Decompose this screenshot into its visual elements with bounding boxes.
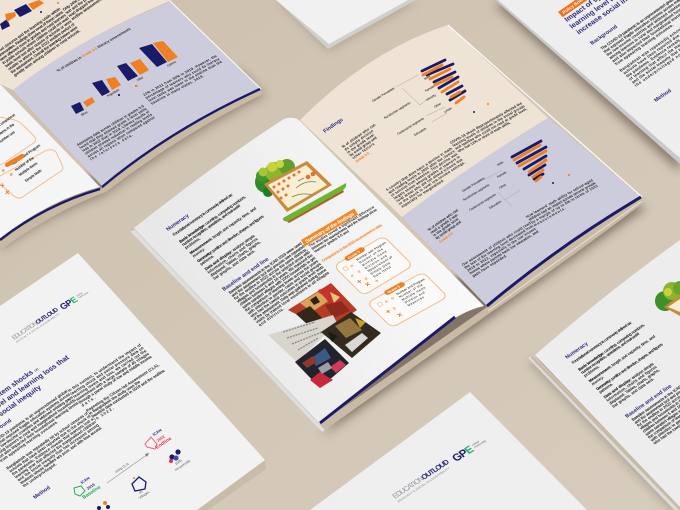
text block: left page grade items: Multiple Items: [18, 161, 39, 177]
callout: grade 5 competency box: Division and: [404, 291, 426, 304]
icon: villages: [132, 477, 151, 500]
callout: grade 3 competency box: Number and Program: [355, 241, 387, 261]
text block: lavender paragraph one: Assessing data across children in grades 3-5: [76, 104, 145, 147]
chart labels: beige chart categories: Education: [413, 127, 428, 137]
text block: numeracy right booklet: problems.: [582, 364, 601, 378]
label: comparison subheading: Comparison in the 2019 assessment in data: [320, 222, 384, 263]
text block: numeracy right booklet: number recognition, operations, and real-world: [580, 331, 640, 375]
binding: navy band on right page: [487, 197, 641, 306]
text block: beige paragraph one: A country that does have a decline in math: [385, 147, 453, 192]
chart labels: lavender chart categories: Gender Perception: [461, 176, 486, 193]
panel: white cover: [0, 253, 265, 510]
text block: background paragraphs: from appearing learning outcomes.: [614, 23, 674, 66]
text block: beige paragraph two: learning levels of children in the social groups: [452, 104, 526, 148]
text block: beige paragraph one: especially for marginalised.: [400, 179, 445, 208]
callout: grade 3 competency box: Measurement of: [367, 255, 393, 273]
callout: grade 3 competency box: Data Items: [372, 265, 392, 278]
text block: baseline paragraph: visits by trained local volunteers in all villages: [254, 270, 330, 324]
text block: beige paragraph one: to the shock in rural low-income settings,: [398, 161, 466, 206]
text block: lavender paragraph two: 21% in 2022 from 36% in 2019. However, the: [142, 54, 218, 97]
icon: villages: 45: [138, 490, 144, 495]
label: grade pill left: [4, 153, 25, 168]
text block: lavender intro: read a grade 2 text: [430, 213, 459, 235]
chart labels: beige chart categories: Rural/urban segments: [383, 101, 412, 120]
logo: GPE: [58, 287, 92, 311]
text block: beige paragraph one: rural areas who did not attend schools due: [395, 158, 464, 203]
callout: grade 3 competency box: ÷: [374, 278, 382, 284]
binding: navy band on left page: [320, 317, 455, 423]
icon: math symbols left page: [0, 168, 13, 197]
text block: findings intro: do simple division: [344, 129, 374, 152]
text block: baseline paragraph: for the endline in 2022 across the same districts,: [233, 247, 308, 301]
text block: numeracy definitions: Geometry: position and direction, shapes, and figures: [196, 214, 265, 263]
heading: baseline and end line: Baseline and end line: [221, 257, 270, 292]
booklet: main open spread: [130, 25, 646, 436]
bar chart: literacy assessment results: Uttar: [136, 75, 144, 82]
callout: grade 5 competency box: Number of the: [398, 283, 424, 299]
bar chart: literacy assessment results: Odisha: [166, 60, 177, 68]
diagram: method endline: ICAN: [151, 428, 163, 437]
text block: baseline paragraph: Baseline assessments in the ICAN 2019 were used: [227, 241, 303, 295]
text block: cover second column: Repeating the Citizen-led Assessment (CLA),: [85, 362, 160, 413]
text block: left page grade items: Number and Program: [11, 144, 41, 166]
text block: numeracy definitions: displayed. Tables, charts, graphs,: [209, 240, 262, 277]
text block: lavender intro: Grade 3-5: [438, 232, 454, 244]
callout: grade 3 competency box: Number of the: [358, 247, 384, 264]
callout: grade box on left page: [0, 117, 63, 198]
text block: beige paragraphs: greatly seen among children in rural schools.: [12, 28, 81, 77]
callout: grade 5 competency box: [366, 271, 448, 328]
callout: grade 3 competency box: Division and: [364, 254, 388, 270]
text block: beige paragraph two: COVID-19 shock disproportionately affected the: [449, 102, 523, 145]
text block: cover first column: the pandemic. Evidence reveals that learners lost a: [11, 416, 95, 476]
text block: lavender paragraph one: Our assessment of children who could read: [461, 221, 532, 267]
text block: cover first column: students whose families are poor, and with less access: [19, 425, 102, 485]
text block: baseline paragraph: who had the lowest outcomes in grade level tests: [249, 264, 325, 318]
diagram: method endline: Endline: [154, 436, 173, 450]
text block: cover second column: In this context, to understand the impact of: [66, 342, 143, 393]
logo: GPE: Global: [471, 440, 480, 447]
panel: beige page section: [0, 0, 172, 90]
text block: cover second column: baseline data conducted in 2019 and the endline: [90, 368, 166, 418]
binding: page block of the booklet: [130, 197, 643, 432]
text block: beige paragraphs: the assessment. Overall the learning losses were: [9, 25, 78, 74]
booklet: bottom centre cover: [310, 392, 587, 510]
text block: baseline paragraph: of the assessment. Data was gathered during home: [252, 267, 327, 321]
heading: method cover: Method: [32, 485, 52, 500]
text block: numeracy right booklet: Data and display: analyse simple: [602, 361, 655, 399]
text block: findings intro: in the grade level: [346, 133, 375, 154]
text block: summary paragraph: The studies reveal a significant difference: [308, 205, 375, 248]
bar chart: literacy assessment results: [71, 41, 178, 117]
diagram: method baseline: ICAN: [79, 476, 91, 485]
text block: beige paragraph one: of schools from baseline. This decline was: [390, 152, 459, 197]
text block: numeracy definitions: patterns.: [199, 253, 215, 266]
text block: lavender paragraph one: homes where parents have low education, and: [469, 230, 539, 275]
callout: grade 5 competency box: e: [383, 299, 390, 305]
text block: lavender intro: % of children who can: [427, 208, 459, 232]
logo: education out loud: EDUCATIONOUTLOUD: [390, 457, 452, 500]
text block: beige paragraph two: who lost 12% or more of math skills.: [457, 121, 512, 153]
text block: lavender intro: by social group and: [435, 220, 462, 240]
text block: cover first column: schools that have been reported due to the shock of: [8, 413, 92, 473]
callout: grade 3 competency box: [332, 234, 413, 296]
callout: grade 5 competency box: ×: [395, 311, 405, 319]
text block: numeracy right booklet: information, charts and figures: [605, 364, 658, 402]
chart labels: lavender chart categories: Education: [488, 200, 503, 210]
booklet: right open page: [528, 240, 680, 510]
text block: lavender paragraph two: baseline in many states, 2019.: [150, 74, 205, 105]
illustration: tree with number board: [255, 159, 346, 223]
text block: baseline right booklet: [630, 367, 680, 445]
logo: GPE: Partnership: [78, 291, 90, 299]
text block: numeracy right booklet: [570, 315, 680, 409]
logo: education out loud: EDUCATIONOUTLOUD: [11, 306, 61, 341]
callout: grade 5 competency box: Multiple Items: [401, 286, 427, 301]
text block: numeracy right booklet: patterns.: [598, 381, 614, 394]
callout: grade 5 competency box: ☐: [376, 301, 385, 309]
chart labels: beige chart categories: Male: [423, 74, 432, 81]
text block: numeracy definitions: Foundational numeracy is commonly defined as:: [171, 192, 234, 237]
text block: numeracy right booklet: Basic knowledge: counting, comparing numbers,: [577, 322, 646, 372]
text block: lavender paragraph one: 2019 to 2022, especially in the low income: [466, 227, 537, 272]
tag: orange article label: [558, 0, 591, 17]
text block: beige paragraphs: [0, 6, 82, 77]
shadow: main booklet: [322, 190, 646, 436]
bar chart: lavender horizontal funnel bars: [512, 141, 546, 181]
chart labels: beige chart categories: Minority: [425, 93, 437, 102]
text block: baseline paragraph: with attention to gender, caste and social groups: [246, 261, 322, 315]
text block: findings intro: [341, 123, 390, 163]
icon: people: [97, 501, 110, 510]
text block: numeracy definitions: money.: [191, 247, 206, 258]
chart labels: beige chart categories: [371, 74, 489, 137]
text block: numeracy right booklet: Geometry: position and direction, shapes, and figures: [595, 342, 664, 391]
booklet: top centre closed: [276, 0, 418, 50]
text block: second beige paragraph: [61, 0, 136, 21]
cover content: title, background text and method, on a single left margin: [0, 347, 137, 500]
text block: lavender paragraph one: [461, 221, 542, 278]
text block: findings intro: % of children who can: [341, 123, 377, 149]
text block: beige paragraph two: and families who could not read at grade level,: [454, 107, 528, 150]
text block: numeracy right booklet: money.: [590, 375, 605, 386]
text block: numeracy definitions: bar graphs, and data sets.: [212, 248, 256, 281]
logo: GPE: GPE: [58, 295, 80, 311]
callout: grade 5 competency box: Grade 5: [387, 285, 401, 294]
binding: navy band left: [0, 189, 100, 240]
diagram: method baseline: 2019: [85, 482, 97, 491]
text block: lavender paragraph one: found that they attained grade 3 level skills: [79, 107, 148, 150]
icon: households: [169, 449, 192, 472]
text block: findings intro: Grade 3-5: [355, 151, 370, 163]
text block: lavender paragraph one: children showed reduction in reading levels: [84, 113, 153, 155]
text block: baseline paragraph: [227, 240, 334, 327]
text block: cover first column: learning year that affected the marginalised children: [13, 420, 97, 479]
chart labels: lavender chart categories: Rural/urban segments: [462, 183, 491, 202]
text block: numeracy right booklet: displayed. Tables, charts, graphs,: [608, 368, 661, 405]
text block: lavender paragraph one: across all regions when compared against: [87, 116, 156, 158]
panel: left white page: [134, 118, 484, 424]
text block: cover second column: in 2022.: [93, 406, 115, 421]
text block: beige paragraphs: in public schools where children could not read: [1, 16, 70, 65]
text block: numeracy right booklet: Foundational numeracy is commonly defined as:: [570, 320, 633, 365]
logo: education out loud: ADVOCACY & SOCIAL ACCOUNTABILITY: [15, 313, 61, 344]
text block: lavender intro: in the grade level: [432, 217, 460, 237]
booklet: top left open: [0, 0, 265, 250]
text block: cover first column: and the social inequity that has increased among: [16, 423, 100, 482]
heading: method: Method: [653, 88, 673, 103]
panel: beige section of right page: [300, 25, 548, 217]
icon: households: Households: [174, 459, 192, 472]
panel: left white page: [0, 84, 100, 238]
text block: lavender paragraph one: the text of the learning level decreased from: [464, 224, 534, 270]
logo: GPE: [450, 436, 490, 464]
heading: numeracy right booklet: Numeracy: [564, 341, 590, 360]
text block: numeracy right booklet: Measurement: length and capacity, time, and: [587, 334, 656, 383]
panel: lavender page section: [13, 2, 260, 187]
text block: cover first column: from appearing learning outcomes.: [0, 419, 59, 463]
text block: summary paragraph: between the assessments and the findings show: [311, 208, 378, 251]
text block: baseline paragraph: and districts.: [257, 306, 285, 327]
text block: numeracy definitions: Measurement: length and capacity, time, and: [188, 206, 257, 255]
bar chart: literacy assessment results: Rajasthan: [106, 88, 121, 98]
callout: grade 5 competency box: Measures: [406, 295, 425, 307]
chart labels: beige chart categories: Caste/social segments: [396, 116, 425, 136]
callout: grade 5 competency box: e: [391, 306, 398, 311]
chart labels: lavender chart categories: Male: [496, 160, 505, 167]
tag: summary of the findings: Summary of the findings: [304, 211, 356, 245]
text block: baseline paragraph: same sampled villages with 1000 households to get: [241, 255, 317, 309]
text block: lavender paragraph two: measurements.: [533, 207, 567, 227]
panel: lavender section of right page: [402, 118, 641, 306]
callout: grade 3 competency box: Grade 3: [347, 250, 361, 260]
logo: GPE: GPE: [450, 444, 477, 464]
text block: beige paragraphs: basic level text after closure of schools or were: [4, 19, 73, 68]
icon: math symbols left page: +: [0, 181, 5, 190]
text block: cover second column: learning shock and social pressure data on: [69, 346, 145, 396]
text block: numeracy definitions: information, charts and figures: [206, 236, 259, 274]
text block: lavender paragraph one: [76, 104, 159, 161]
icon: math symbols left page: e: [10, 172, 13, 178]
text block: cover first column: Bangladesh was repeatedly hit by school closures of: [5, 410, 90, 470]
illustration: tree and board cropped: [655, 281, 680, 316]
text block: lavender paragraph one: less in 2022 than in 2019. Literacy results of: [81, 110, 150, 152]
text block: left page grade items: Simple Math: [24, 169, 43, 183]
booklet: top right closed: [494, 0, 680, 172]
heading: baseline right booklet: Baseline and end line: [624, 384, 673, 419]
chart labels: lavender chart categories: Caste/social segments: [468, 192, 497, 212]
arrow: baseline to endline: using CLA: [114, 462, 130, 474]
text block: numeracy right booklet: bar graphs, and data sets.: [611, 376, 655, 409]
chart labels: lavender chart categories: Female: [496, 170, 508, 179]
bar chart: beige horizontal funnel bars: [422, 60, 465, 103]
diagram: method endline: 2022: [155, 434, 167, 443]
heading: numeracy: Numeracy: [165, 213, 191, 232]
bar chart: literacy assessment results: Bihar: [80, 110, 89, 117]
callout: grade 3 competency box: Simple Data: [369, 261, 391, 276]
callout: grade 5 competency box: +: [383, 307, 394, 316]
text block: cover second column: assessment with a large sample of 45 villages: [74, 351, 150, 402]
text block: cover second column: data.: [80, 395, 97, 407]
text block: summary paragraph: learners' grades 3-5 and: [313, 230, 350, 253]
callout: grade 5 competency box: e: [390, 296, 396, 301]
text block: lavender paragraph one: gaps have expanded.: [471, 254, 508, 278]
diagram: method baseline: [74, 476, 103, 500]
booklet: bottom left cover: [0, 253, 266, 510]
text block: findings intro: by social group and: [349, 136, 378, 157]
text block: numeracy definitions: Data and display: analyse simple: [203, 233, 256, 271]
logo: education out loud: ADVOCACY & SOCIAL ACCOUNTABILITY: [396, 466, 451, 503]
text block: beige paragraph one: [385, 147, 469, 208]
text block: findings intro: other factors: [351, 142, 376, 160]
text block: cover first column: the underprivileged.: [21, 461, 58, 488]
icon: math symbols left page: ×: [5, 188, 10, 197]
callout: grade 3 competency box: e: [363, 276, 370, 282]
text block: lavender paragraph two: level tasks was lower in the endline than the: [147, 60, 223, 102]
text block: background paragraphs: [598, 0, 680, 88]
text block: beige paragraphs: were affected more in grades and rural learners: [0, 13, 67, 62]
text block: baseline paragraph: and the assessment tool and process was repeated: [230, 244, 306, 298]
text block: lavender paragraph two: percentage of learners who could do literacy: [145, 57, 221, 100]
heading: findings: Findings: [322, 117, 345, 134]
text block: cover second column: learning levels and loss, we carried out the: [72, 348, 147, 399]
photo: collage of children learning: [268, 283, 381, 388]
callout: grade 5 competency box: Number and Program: [395, 277, 426, 296]
chart legend: beige mini chart: [0, 0, 59, 30]
chart labels: lavender chart categories: Other: [498, 183, 507, 190]
text block: lavender paragraph two: by a margin of up to 5% in terms of 2022: [530, 184, 599, 224]
text block: numeracy definitions: Basic knowledge: counting, comparing numbers,: [178, 194, 247, 244]
chart labels: lavender chart categories: [461, 160, 570, 212]
text block: baseline paragraph: the comparison of learning levels across the years: [244, 259, 319, 312]
callout: grade 3 competency box: ☐: [341, 265, 351, 273]
text block: numeracy definitions: [171, 187, 281, 281]
icon: households: 1000: [174, 459, 183, 466]
text block: beige paragraph one: and reading levels in 2022 after the closure: [388, 149, 456, 195]
callout: grade 3 competency box: Multiple Items: [361, 249, 388, 267]
callout: grade 3 competency box: +: [354, 277, 365, 286]
arrow: baseline to endline: [107, 453, 149, 483]
text block: lavender paragraph two: How learners' math ability for school-aged: [525, 179, 594, 219]
text block: cover second column: through a panel study of low and middle income: [77, 354, 153, 404]
callout: grade 3 competency box: e: [349, 273, 356, 279]
heading: chart title: % of children in Grade 3-5 literacy assessments: [56, 27, 132, 73]
callout: grade 3 competency box: e: [349, 263, 356, 269]
text block: beige paragraph one: largely shown among grades of learners in: [393, 155, 461, 200]
text block: beige paragraphs: unable to attend in the 2022 endline period of: [7, 21, 76, 71]
chart labels: beige chart categories: Other: [433, 102, 442, 109]
text block: baseline paragraph: villages and households in the selected areas with: [235, 250, 311, 304]
logo: GPE: Partnership: [473, 439, 487, 449]
callout: grade 3 competency box: e: [356, 269, 363, 275]
text block: lavender paragraph one: the reference data.: [89, 133, 134, 161]
panel: right booklet page: [535, 240, 680, 507]
icon: villages: Villages: [138, 490, 151, 500]
text block: baseline paragraph: children between 5 and 16 years. We matched the: [238, 253, 314, 306]
diagram: method baseline: Baseline: [81, 485, 103, 500]
text block: lavender paragraph two: children had an impact across several groups: [528, 181, 597, 222]
binding: page block: [0, 89, 263, 250]
chart labels: beige chart categories: Gender Perception: [371, 86, 396, 103]
text block: numeracy definitions: problems.: [183, 236, 202, 250]
callout: grade 3 competency box: ×: [363, 280, 373, 289]
chart labels: beige chart categories: Urban: [443, 106, 453, 114]
text block: cover second column: [66, 342, 169, 421]
text block: numeracy definitions: number recognition, operations, and real-world: [181, 203, 241, 247]
text block: cover second column: in Bangladesh the study uses the: [87, 379, 141, 416]
icon: math symbols left page: e: [2, 168, 5, 174]
heading: background: Background: [589, 24, 619, 46]
text block: left page grade items: Number of the: [14, 156, 35, 172]
text block: left page grade items: [0, 113, 43, 183]
binding: navy cover band: [102, 89, 260, 187]
text block: cover first column: [0, 388, 106, 488]
logo: GPE: Global: [77, 292, 84, 297]
diagram: method endline: [145, 428, 173, 450]
chart labels: beige chart categories: Female: [424, 84, 436, 93]
text block: lavender intro: [427, 208, 470, 244]
